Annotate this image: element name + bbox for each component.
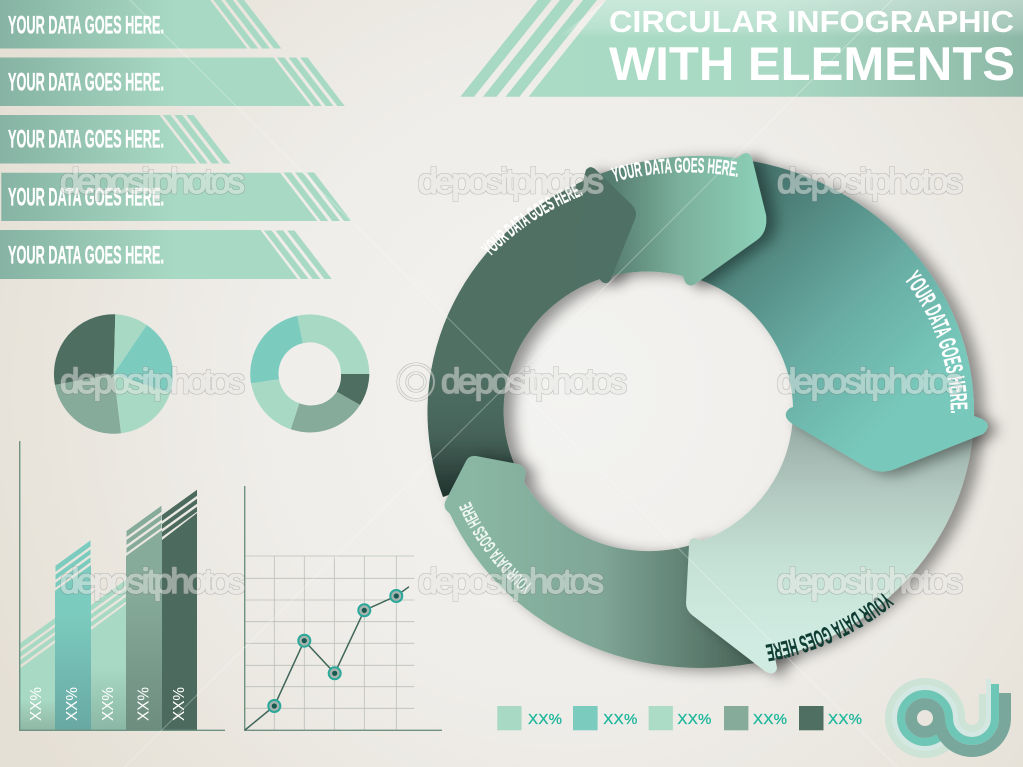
legend item 2 bbox=[573, 706, 637, 730]
legend item 4: XX% bbox=[753, 711, 787, 728]
legend item 3 bbox=[649, 706, 711, 730]
bar 2: XX% bbox=[64, 687, 81, 721]
segment: green top arrow bbox=[585, 153, 766, 286]
bar chart bbox=[20, 441, 225, 730]
donut chart bbox=[250, 314, 369, 432]
legend item 2: XX% bbox=[603, 711, 637, 728]
bar 3: XX% bbox=[100, 687, 117, 721]
legend item 3: XX% bbox=[677, 711, 711, 728]
watermark bbox=[60, 162, 963, 601]
bar 5 bbox=[162, 490, 197, 730]
segment labels: YOUR DATA GOES HERE. bbox=[459, 501, 532, 594]
segment: dark left arrow bbox=[427, 167, 636, 497]
watermark: depositphotos bbox=[441, 362, 627, 401]
legend item 5 bbox=[799, 706, 862, 730]
legend item 1 bbox=[497, 706, 562, 730]
bar 1 bbox=[20, 618, 55, 730]
line chart bbox=[245, 486, 442, 730]
banner 5 bbox=[0, 230, 332, 279]
panel: data banners bbox=[0, 0, 351, 279]
banner 1 bbox=[0, 0, 281, 48]
banner 3: YOUR DATA GOES HERE. bbox=[8, 126, 164, 154]
title banner bbox=[460, 0, 1023, 97]
segment: light lower-right arrow bbox=[686, 411, 974, 673]
watermark: depositphotos bbox=[777, 362, 963, 401]
watermark: depositphotos bbox=[418, 562, 604, 601]
legend bbox=[497, 706, 862, 730]
legend item 4 bbox=[724, 706, 787, 730]
title text bbox=[609, 4, 1015, 90]
pie chart bbox=[54, 314, 173, 434]
icon: logo mark bbox=[888, 679, 1005, 754]
segment: teal right arrow bbox=[680, 158, 988, 472]
watermark: depositphotos bbox=[777, 562, 963, 601]
segment labels: YOUR DATA GOES HERE. bbox=[906, 269, 968, 413]
title text: WITH ELEMENTS bbox=[609, 37, 1015, 90]
banner 2 bbox=[0, 58, 345, 106]
watermark: depositphotos bbox=[418, 162, 604, 201]
bar 2 bbox=[55, 540, 91, 730]
bar 4: XX% bbox=[136, 687, 152, 721]
bar 1: XX% bbox=[28, 687, 45, 721]
bar 4 bbox=[126, 506, 162, 730]
watermark: depositphotos bbox=[60, 162, 245, 201]
banner 5: YOUR DATA GOES HERE. bbox=[8, 241, 164, 269]
segment labels: YOUR DATA GOES HERE. bbox=[610, 158, 738, 182]
watermark: depositphotos bbox=[60, 562, 245, 601]
watermark: depositphotos bbox=[60, 362, 245, 401]
bar 3 bbox=[91, 580, 126, 730]
banner 4: YOUR DATA GOES HERE. bbox=[8, 184, 164, 212]
banner 3 bbox=[0, 115, 231, 164]
dark arrow head bbox=[575, 167, 636, 287]
faint diagonal lines bbox=[125, 0, 897, 767]
watermark: depositphotos bbox=[777, 162, 963, 201]
bar chart axes bbox=[20, 441, 225, 730]
segment: mid green lower-left arrow bbox=[444, 456, 790, 668]
legend item 1: XX% bbox=[528, 711, 562, 728]
banner 2: YOUR DATA GOES HERE. bbox=[8, 69, 164, 97]
banner 1: YOUR DATA GOES HERE. bbox=[8, 11, 164, 39]
title text: CIRCULAR INFOGRAPHIC bbox=[609, 4, 1014, 39]
legend item 5: XX% bbox=[828, 711, 862, 728]
data line bbox=[245, 587, 409, 730]
line chart axes bbox=[245, 486, 442, 730]
data markers bbox=[268, 590, 402, 712]
bar 5: XX% bbox=[171, 687, 188, 721]
segment labels: YOUR DATA GOES HERE. bbox=[480, 184, 583, 256]
banner 4 bbox=[1, 172, 351, 221]
